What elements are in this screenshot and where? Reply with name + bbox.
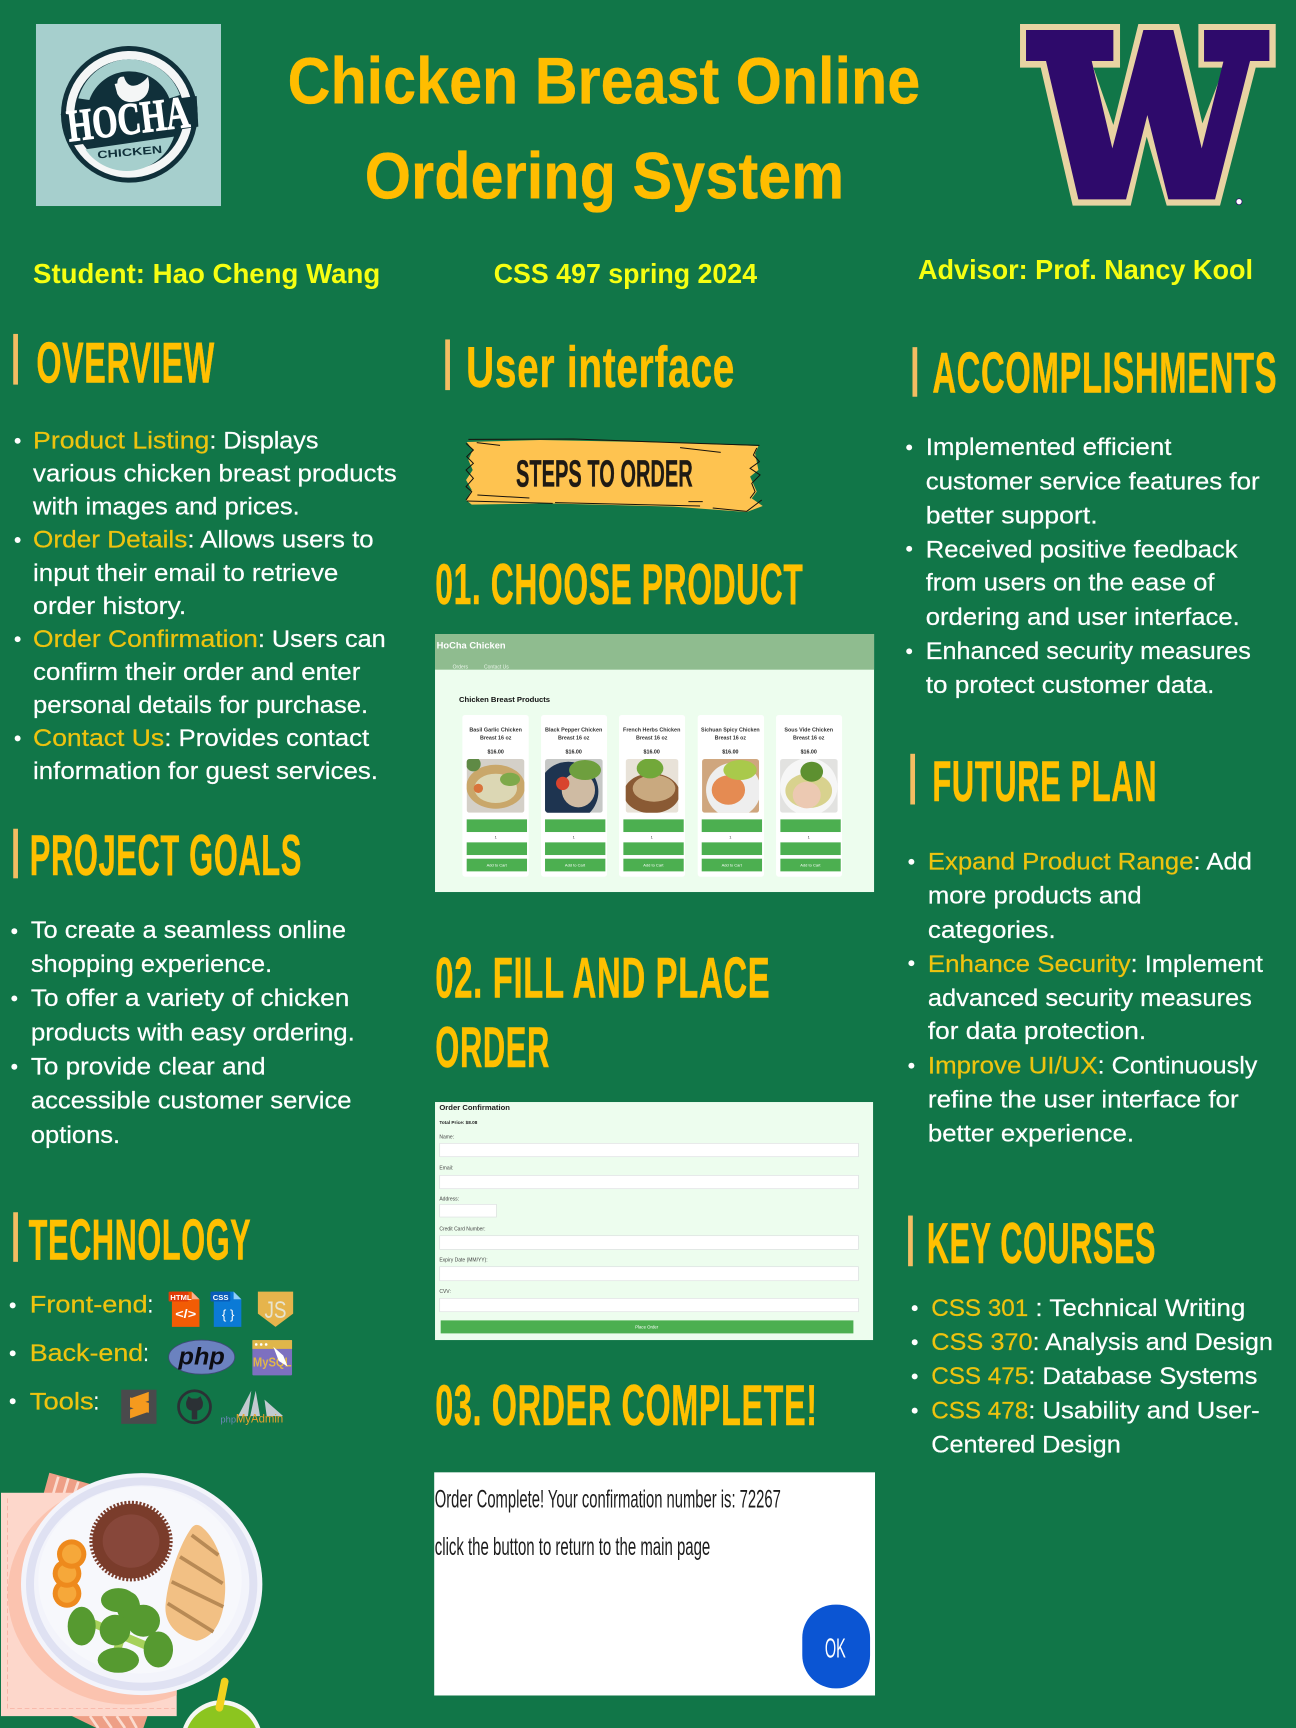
text block: overview list: Contact Us (33, 725, 164, 752)
text block: overview list: personal details for purchase. (33, 692, 368, 719)
panel: key courses (908, 1212, 1273, 1458)
text block: tools: : (94, 1389, 99, 1416)
screenshot: product page (435, 634, 874, 892)
product card 4 (698, 715, 764, 877)
screenshot: order form: Email: (439, 1165, 453, 1171)
panel: technology (10, 1209, 293, 1426)
heading: User interface (466, 336, 735, 400)
product card 3: Breast 16 oz (636, 735, 668, 741)
heading accent (912, 347, 917, 397)
step 3 heading: 03. ORDER COMPLETE! (435, 1374, 818, 1438)
text block: back-end: : (143, 1340, 149, 1367)
text block: courses list: Centered Design (931, 1431, 1121, 1458)
text block: courses list: CSS 370 (931, 1329, 1033, 1356)
screenshot: order form: CVV: (439, 1289, 451, 1295)
screenshot: order form: Credit Card Number: (439, 1226, 485, 1232)
text block: accomplishments list: ordering and user interface. (926, 604, 1240, 631)
product card 2: Breast 16 oz (558, 735, 590, 741)
text block: overview list: : Users can (258, 626, 386, 653)
screenshot: order form: Place Order (635, 1325, 659, 1330)
text block: accomplishments list: from users on the ease of (926, 570, 1215, 597)
title: Chicken Breast Online (288, 45, 920, 119)
icon: HTML: HTML (170, 1293, 192, 1302)
screenshot: order form: Name: (439, 1134, 454, 1140)
illustration: plate of food (1, 1473, 262, 1728)
screenshot: order form: Expiry Date (MM/YY): (439, 1257, 488, 1263)
text block: future plan list: : Add (1194, 849, 1252, 876)
text block: overview list: order history. (33, 593, 186, 620)
text block: future plan list: advanced security measures (928, 985, 1252, 1012)
panel: accomplishments (906, 341, 1277, 699)
icon: CSS: CSS (213, 1293, 229, 1302)
panel: header (33, 24, 1276, 289)
icon: PHP: php (177, 1343, 225, 1370)
text block: goals list: To provide clear and (31, 1053, 266, 1080)
screenshot: order complete dialog: Order Complete! Your confirmation number is: 72267 (435, 1486, 781, 1514)
text block: courses list: : Usability and User- (1028, 1397, 1260, 1424)
text block: goals list (11, 917, 355, 1149)
screenshot: order complete dialog (434, 1472, 875, 1695)
text block: future plan list (908, 849, 1263, 1148)
step 2 heading: 02. FILL AND PLACE (435, 946, 770, 1010)
text block: tools: Tools (30, 1389, 94, 1416)
step 1 heading: 01. CHOOSE PRODUCT (435, 553, 803, 617)
text block: overview list: Product Listing (33, 428, 209, 455)
product card 3: Add to Cart (643, 863, 664, 868)
screenshot: order form: Address: (439, 1196, 459, 1202)
heading: PROJECT GOALS (30, 824, 302, 888)
advisor: Advisor: Prof. Nancy Kool (918, 254, 1253, 285)
product card 4: $16.00 (722, 749, 739, 755)
pink napkin (1, 1492, 177, 1716)
screenshot: product page: Contact Us (484, 664, 509, 670)
product card 2 (538, 715, 607, 877)
icon: HTML: </> (175, 1307, 196, 1321)
text block: overview list: Order Details (33, 527, 187, 554)
text block: overview list: confirm their order and enter (33, 659, 360, 686)
product card 1: $16.00 (488, 749, 504, 755)
heading accent (908, 1216, 913, 1266)
panel: user interface (434, 336, 875, 1695)
text block: accomplishments list: to protect customer data. (926, 672, 1214, 699)
broccoli (68, 1588, 173, 1673)
panel: overview (13, 331, 397, 785)
text block: courses list: : Analysis and Design (1033, 1329, 1273, 1356)
text block: back-end: Back-end (30, 1340, 143, 1367)
text block: courses list: : Database Systems (1028, 1363, 1257, 1390)
heading accent (13, 334, 18, 385)
text block: accomplishments list: better support. (926, 502, 1098, 529)
text block: courses list: CSS 478 (931, 1397, 1028, 1424)
heading accent (910, 754, 915, 804)
text block: accomplishments list: Received positive feedback (926, 537, 1239, 564)
heading accent (445, 339, 450, 390)
chicken breast (165, 1525, 225, 1641)
panel: future plan (908, 750, 1263, 1148)
product card 2: Add to Cart (565, 863, 586, 868)
logo: HoCha Chicken: CHICKEN (97, 144, 163, 162)
product card 5: 1 (808, 834, 811, 839)
text block: goals list: options. (31, 1122, 120, 1149)
product card 3: 1 (651, 834, 654, 839)
text block: tools (10, 1389, 99, 1416)
logo: UW W (1020, 24, 1276, 206)
product card 5: $16.00 (801, 749, 817, 755)
product card 4: Breast 16 oz (715, 735, 746, 741)
product card 2: 1 (573, 834, 576, 839)
product card 2: Black Pepper Chicken (545, 728, 602, 734)
product card 4: Add to Cart (722, 863, 743, 868)
text block: courses list: CSS 301 (931, 1295, 1028, 1322)
text block: front-end: : (148, 1292, 153, 1319)
screenshot: product page: Chicken Breast Products (459, 695, 550, 704)
product card 5: Add to Cart (800, 863, 821, 868)
plate (21, 1473, 262, 1695)
product card 1: Breast 16 oz (480, 735, 512, 741)
icon: PHP (169, 1340, 235, 1374)
product card 5: Sous Vide Chicken (784, 728, 833, 734)
product card 3: French Herbs Chicken (623, 728, 680, 734)
carrots (53, 1539, 86, 1608)
product card 2: $16.00 (566, 749, 582, 755)
heading accent (13, 829, 18, 878)
green drink (181, 1681, 262, 1728)
product card 4: Sichuan Spicy Chicken (701, 728, 760, 734)
product card 3: $16.00 (644, 749, 660, 755)
text block: overview list: with images and prices. (32, 494, 300, 521)
text block: courses list: CSS 475 (931, 1363, 1028, 1390)
text block: future plan list: categories. (928, 917, 1056, 944)
product card 1: Add to Cart (487, 863, 508, 868)
product card 1: Basil Garlic Chicken (469, 728, 522, 734)
student name: Student: Hao Cheng Wang (33, 258, 380, 289)
screenshot: order complete dialog: click the button to return to the main page (435, 1533, 710, 1561)
screenshot: order form: Order Confirmation (439, 1103, 510, 1112)
text block: goals list: accessible customer service (31, 1088, 352, 1115)
text block: goals list: products with easy ordering. (31, 1019, 355, 1046)
title: Ordering System (365, 139, 844, 213)
banner: steps to order: STEPS TO ORDER (516, 454, 693, 496)
product card 4: 1 (729, 834, 732, 839)
panel: project goals (11, 824, 355, 1149)
icon: JavaScript (258, 1292, 293, 1327)
screenshot: order complete dialog: OK (825, 1632, 846, 1663)
icon: MySQL (252, 1340, 292, 1375)
screenshot: order form: Total Price: $8.08 (439, 1120, 478, 1125)
text block: goals list: shopping experience. (31, 951, 272, 978)
text block: future plan list: better experience. (928, 1121, 1134, 1148)
product card 5 (776, 715, 842, 877)
text block: overview list: : Allows users to (187, 527, 374, 554)
heading: OVERVIEW (36, 331, 215, 395)
text block: overview list: : Provides contact (164, 725, 369, 752)
icon: CSS: { } (222, 1307, 235, 1322)
banner: steps to order (466, 439, 763, 512)
text block: accomplishments list (906, 434, 1260, 699)
logo: HoCha Chicken: HOCHA (64, 87, 192, 151)
text block: goals list: To create a seamless online (31, 917, 346, 944)
text block: future plan list: Expand Product Range (928, 849, 1194, 876)
screenshot: order form (435, 1102, 873, 1340)
text block: future plan list: : Continuously (1098, 1052, 1258, 1079)
product card 5: Breast 16 oz (793, 735, 825, 741)
text block: overview list: information for guest services. (33, 758, 378, 785)
icon: phpMyAdmin: MyAdmin (236, 1412, 283, 1426)
text block: future plan list: for data protection. (928, 1018, 1146, 1045)
logo: HoCha Chicken (36, 24, 221, 206)
icon: phpMyAdmin (220, 1391, 283, 1426)
text block: courses list (912, 1295, 1273, 1458)
heading accent (13, 1212, 18, 1262)
text block: future plan list: Improve UI/UX (928, 1052, 1098, 1079)
product card 3 (619, 715, 685, 877)
text block: accomplishments list: Implemented efficient (926, 434, 1172, 461)
heading: TECHNOLOGY (29, 1209, 251, 1273)
rice (92, 1504, 170, 1578)
screenshot: product page: HoCha Chicken (437, 641, 506, 651)
text block: goals list: To offer a variety of chicken (31, 985, 349, 1012)
text block: accomplishments list: customer service features for (926, 468, 1260, 495)
text block: courses list: : Technical Writing (1028, 1295, 1245, 1322)
text block: future plan list: more products and (928, 883, 1142, 910)
icon: phpMyAdmin: php (220, 1415, 236, 1425)
icon: Sublime Text (121, 1390, 156, 1424)
text block: front-end: Front-end (30, 1292, 148, 1319)
product card 1 (462, 715, 529, 877)
course: CSS 497 spring 2024 (494, 258, 758, 289)
text block: future plan list: Enhance Security (928, 951, 1132, 978)
title (288, 45, 920, 213)
product card 1: 1 (495, 834, 498, 839)
step 2 heading: ORDER (435, 1016, 550, 1080)
text block: overview list: various chicken breast products (33, 461, 397, 488)
text block: overview list: Order Confirmation (33, 626, 258, 653)
icon: GitHub (179, 1391, 210, 1423)
text block: overview list: : Displays (209, 428, 318, 455)
screenshot: product page: Orders (453, 664, 468, 670)
step 2 heading (435, 946, 770, 1080)
text block: overview list: input their email to retrieve (33, 560, 338, 587)
icon: CSS (210, 1292, 241, 1327)
icon: MySQL: MySQL (253, 1356, 292, 1370)
text block: overview list (15, 428, 397, 785)
text block: future plan list: refine the user interface for (928, 1087, 1239, 1114)
text block: future plan list: : Implement (1131, 951, 1263, 978)
icon: HTML (169, 1292, 199, 1327)
text block: accomplishments list: Enhanced security measures (926, 638, 1251, 665)
striped napkin (40, 1473, 148, 1728)
icon: JavaScript: JS (264, 1297, 287, 1324)
